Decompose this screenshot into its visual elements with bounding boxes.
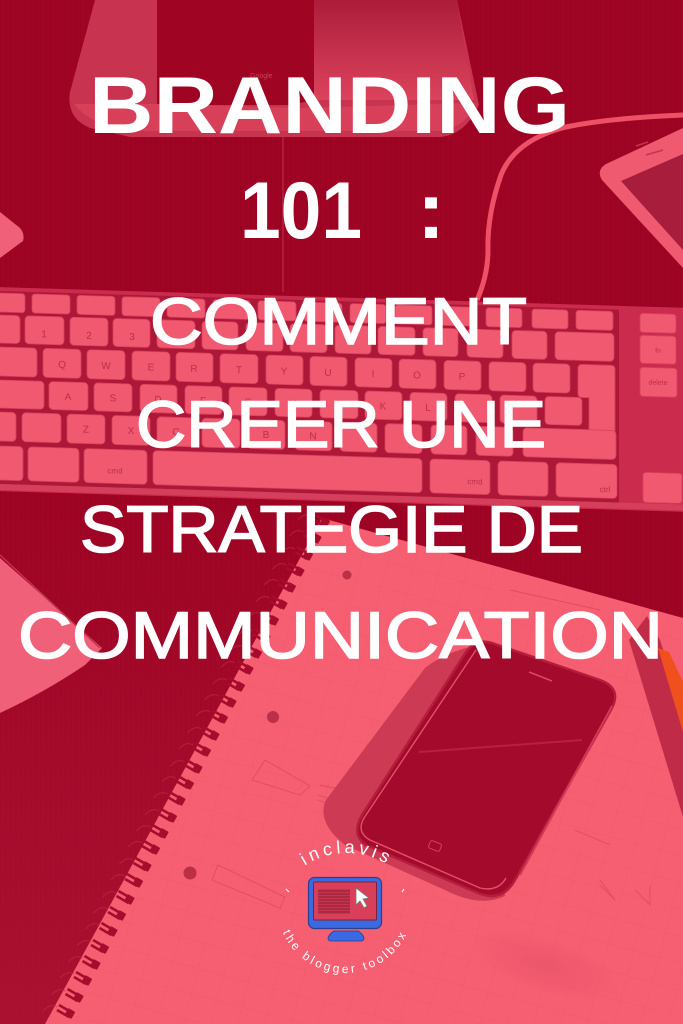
icon: monitor stand: [328, 931, 364, 941]
title: [18, 61, 663, 672]
phone body: [357, 642, 615, 896]
ASDF key row: K: [380, 401, 387, 413]
QWERTY key row: [0, 347, 615, 459]
ZXCV key row: X: [128, 426, 135, 437]
number key row: 3: [129, 332, 135, 343]
notebook page: [45, 518, 683, 1024]
ASDF key row: A: [65, 392, 72, 403]
QWERTY key row: Q: [58, 360, 66, 371]
smartphone on notebook: [323, 642, 615, 901]
spiral binding: [43, 514, 330, 1019]
ASDF key row: J: [337, 400, 341, 411]
stand logo text: Google: [250, 73, 273, 80]
logo: inclavis: [283, 840, 406, 975]
function key row: [0, 293, 613, 330]
QWERTY key row: W: [101, 361, 111, 372]
smartphone top right: [600, 128, 683, 268]
heading line: 101: 101: [240, 166, 362, 256]
QWERTY key row: I: [372, 369, 374, 380]
QWERTY key row: U: [324, 368, 332, 379]
bottom key row with space bar: cmd: [467, 477, 483, 486]
QWERTY key row: T: [236, 365, 242, 376]
side keys: [640, 313, 682, 503]
pen on notebook: [629, 616, 683, 817]
ZXCV key row: [0, 412, 616, 459]
object at left edge: [0, 212, 24, 258]
logo name arc: inclavis: [299, 840, 389, 865]
subtitle line: STRATEGIE DE: STRATEGIE DE: [80, 492, 583, 566]
subtitle line: COMMENT: COMMENT: [150, 284, 527, 358]
phone shadow: [323, 645, 505, 901]
ASDF key row: D: [154, 395, 162, 406]
phone home button: [428, 840, 442, 852]
heading line: BRANDING: BRANDING: [89, 61, 570, 151]
keyboard body: [0, 287, 683, 512]
bottom key row with space bar: ctrl: [600, 485, 611, 494]
pencil sketches: [212, 590, 650, 908]
ZXCV key row: Z: [83, 424, 89, 436]
ASDF key row: S: [110, 393, 117, 404]
side keys: fn: [655, 348, 661, 355]
QWERTY key row: R: [190, 364, 198, 375]
ASDF key row: F: [200, 396, 206, 407]
ASDF key row: H: [289, 399, 297, 410]
ASDF key row: [0, 380, 582, 425]
bottom key row with space bar: cmd: [107, 466, 123, 476]
subtitle line: COMMUNICATION: COMMUNICATION: [18, 598, 663, 672]
phone speaker: [529, 672, 552, 681]
cable: [477, 115, 683, 300]
punched holes: [184, 570, 352, 880]
number key row: 2: [86, 331, 92, 342]
ZXCV key row: N: [309, 431, 317, 442]
phone highlight edge: [361, 650, 506, 889]
QWERTY key row: E: [148, 362, 155, 374]
page shadow: [460, 914, 630, 1016]
ZXCV key row: B: [263, 430, 270, 441]
QWERTY key row: O: [413, 370, 421, 382]
number key row: 1: [41, 329, 47, 340]
phone reflection: [419, 740, 582, 752]
subtitle line: CREER UNE: CREER UNE: [136, 387, 546, 461]
ASDF key row: L: [425, 403, 431, 414]
ZXCV key row: C: [172, 427, 180, 438]
side keys: delete: [648, 379, 668, 387]
ZXCV key row: V: [218, 429, 225, 440]
logo tagline arc: the blogger toolbox: [283, 930, 406, 975]
monitor stand: [69, 0, 479, 137]
QWERTY key row: P: [459, 372, 466, 383]
logo dashes: [286, 889, 404, 892]
ASDF key row: G: [244, 397, 252, 409]
loose paper at left: [0, 555, 102, 713]
heading colon: :: [417, 166, 445, 256]
QWERTY key row: Y: [281, 366, 288, 378]
desk seam line: [282, 137, 284, 292]
number key row: [0, 315, 614, 361]
notebook: [43, 514, 683, 1024]
icon: text block on screen: [318, 889, 350, 914]
bottom key row with space bar: [0, 446, 617, 499]
icon: mouse cursor: [356, 888, 369, 908]
icon: computer monitor: [308, 878, 382, 941]
desk lighter lower area: [0, 500, 330, 1024]
keyboard: [0, 287, 683, 512]
